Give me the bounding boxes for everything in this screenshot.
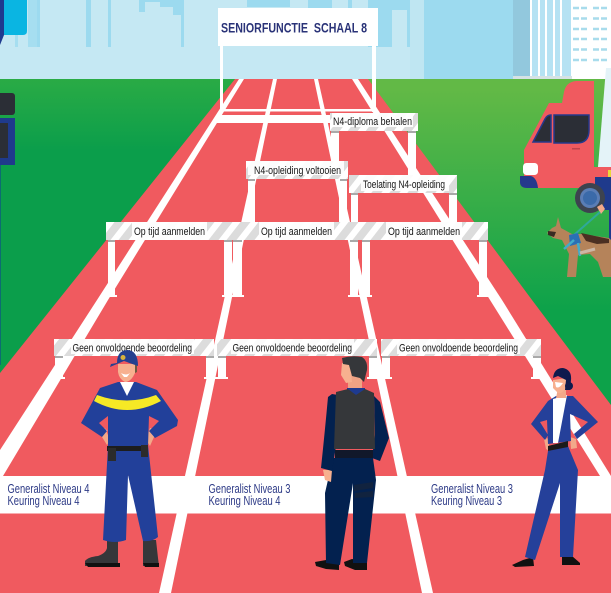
level label: lane 3 [431,482,513,508]
level label: lane 2: Generalist Niveau 3 [208,482,291,496]
finish sign: SENIORFUNCTIE SCHAAL 8 [221,20,367,36]
background: grass [0,79,611,419]
icon: vehicle at left edge [0,93,15,365]
hurdle: Toelating N4-opleiding [349,175,457,222]
hurdle row: Op tijd aanmelden: Op tijd aanmelden [388,226,460,238]
hurdle: N4-diploma behalen [330,113,418,176]
figure: police officer [315,356,389,570]
hurdle row: Geen onvoldoende beoordeling: Geen onvoldoende beoordeling [399,342,518,354]
hurdle row: Op tijd aanmelden: Op tijd aanmelden [134,226,205,238]
hurdle row: Geen onvoldoende beoordeling: Geen onvoldoende beoordeling [72,342,192,354]
hurdle legs [53,356,541,379]
hurdle legs [106,240,489,297]
figure: woman [512,368,598,567]
hurdle row: Op tijd aanmelden [106,222,489,297]
finish sign [218,8,378,112]
level label: lane 3: Keuring Niveau 3 [431,494,502,508]
hurdle: N4-diploma behalen: N4-diploma behalen [333,116,412,128]
level label: lane 1 [8,482,90,508]
hurdle: N4-opleiding voltooien [243,161,348,222]
hurdle row: Geen onvoldoende beoordeling: Geen onvoldoende beoordeling [232,342,352,354]
hurdle: N4-opleiding voltooien: N4-opleiding voltooien [254,165,341,177]
icon: dog handler [574,170,611,275]
hurdle: Toelating N4-opleiding: Toelating N4-opleiding [363,179,445,191]
icon: blue building corner [0,0,27,45]
background: sky and skyline [0,0,611,80]
hurdle row: Geen onvoldoende beoordeling [53,339,541,379]
start band with levels [0,476,611,514]
icon: red truck [520,68,611,213]
level label: lane 1: Generalist Niveau 4 [8,482,90,496]
level label: lane 2 [208,482,291,508]
level label: lane 2: Keuring Niveau 4 [208,494,281,508]
icon: dog [547,217,611,277]
level label: lane 3: Generalist Niveau 3 [431,482,513,496]
figure: firefighter [81,350,178,567]
hurdle row: Op tijd aanmelden: Op tijd aanmelden [261,226,332,238]
level label: lane 1: Keuring Niveau 4 [8,494,80,508]
